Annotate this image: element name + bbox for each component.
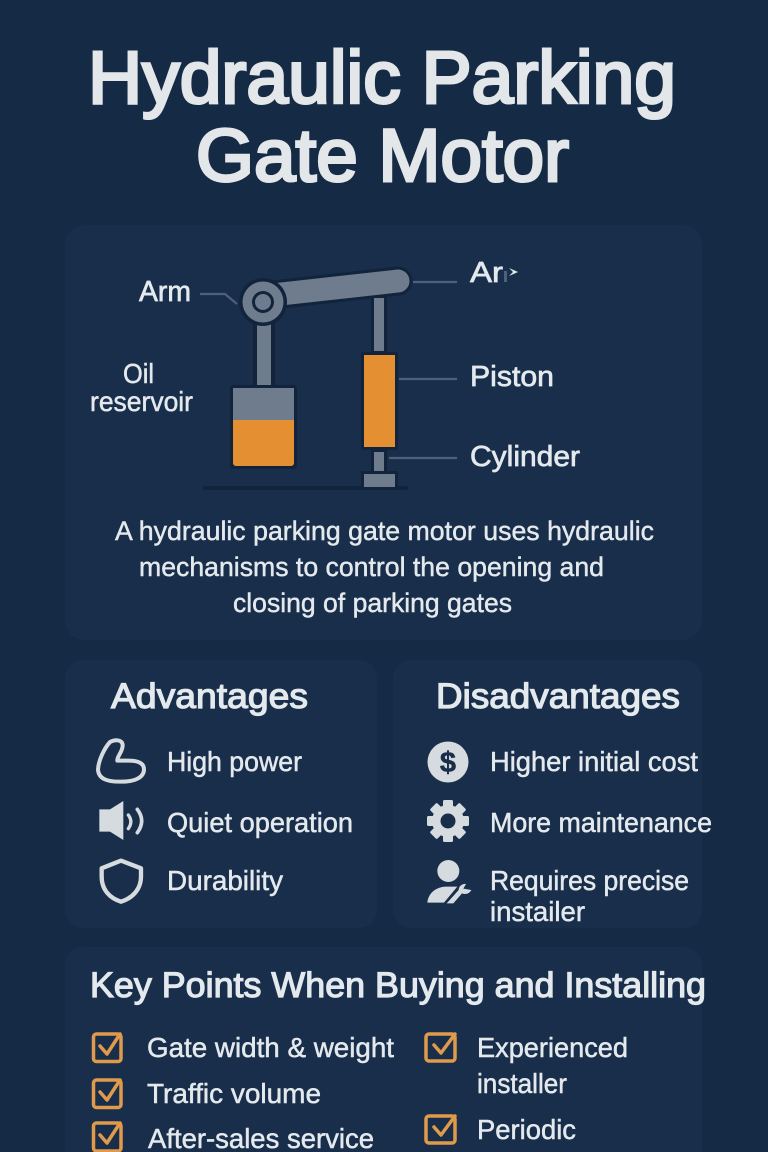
item: quiet operation: Quiet operation	[167, 807, 353, 838]
item: experienced installer: Experienced	[477, 1032, 628, 1063]
icon: dollar coin	[428, 742, 468, 782]
item: periodic: Periodic	[477, 1114, 576, 1145]
description text: mechanisms to control the opening and	[139, 552, 604, 582]
label: cylinder: Cylinder	[470, 441, 580, 473]
label: arm right	[470, 257, 518, 289]
panel: advantages	[65, 660, 377, 928]
icon: speaker	[99, 801, 142, 840]
item: more maintenance: More maintenance	[490, 807, 712, 838]
leader lines	[200, 282, 457, 458]
heading: advantages: Advantages	[111, 677, 308, 716]
checkbox: traffic volume	[94, 1080, 121, 1108]
diagram: hydraulic gate mechanism	[203, 278, 408, 490]
item: requires precise installer: instailer	[490, 896, 585, 927]
panel: key points	[65, 947, 706, 1152]
item: experienced installer	[477, 1032, 628, 1099]
item: requires precise installer	[490, 865, 689, 927]
icon: shield	[102, 861, 141, 902]
item: durability: Durability	[167, 865, 283, 896]
label: oil reservoir: Oil	[123, 358, 154, 389]
label: oil reservoir: reservoir	[90, 386, 193, 417]
heading: disadvantages: Disadvantages	[436, 677, 680, 716]
item: traffic volume: Traffic volume	[147, 1078, 321, 1109]
label: oil reservoir	[90, 358, 193, 417]
item: higher initial cost: Higher initial cost	[490, 746, 698, 777]
description text: A hydraulic parking gate motor uses hydraulic	[115, 516, 654, 546]
icon: dollar coin: $	[440, 747, 456, 779]
checkbox: gate width	[94, 1034, 121, 1062]
item: requires precise installer: Requires precise	[490, 865, 689, 896]
label: piston: Piston	[470, 361, 554, 393]
title: Gate Motor	[196, 114, 569, 197]
title: Hydraulic Parking	[88, 36, 676, 119]
icon: flexed arm	[98, 740, 144, 782]
label: arm left: Arm	[139, 276, 191, 308]
panel: disadvantages	[393, 660, 712, 928]
description text	[115, 516, 654, 618]
panel: how it works	[65, 225, 702, 640]
item: experienced installer: installer	[477, 1068, 567, 1099]
label: arm right: Ar	[470, 257, 503, 289]
checkbox: periodic	[426, 1116, 455, 1143]
checkbox: after-sales service	[94, 1123, 121, 1151]
description text: closing of parking gates	[233, 588, 512, 618]
item: gate width and weight: Gate width & weight	[147, 1032, 394, 1063]
heading: key points: Key Points When Buying and Installing	[90, 966, 706, 1005]
item: high power: High power	[167, 746, 302, 777]
checkbox: experienced installer	[426, 1034, 455, 1061]
icon: installer with wrench	[427, 860, 471, 903]
title	[88, 36, 676, 197]
icon: gear	[427, 800, 469, 842]
